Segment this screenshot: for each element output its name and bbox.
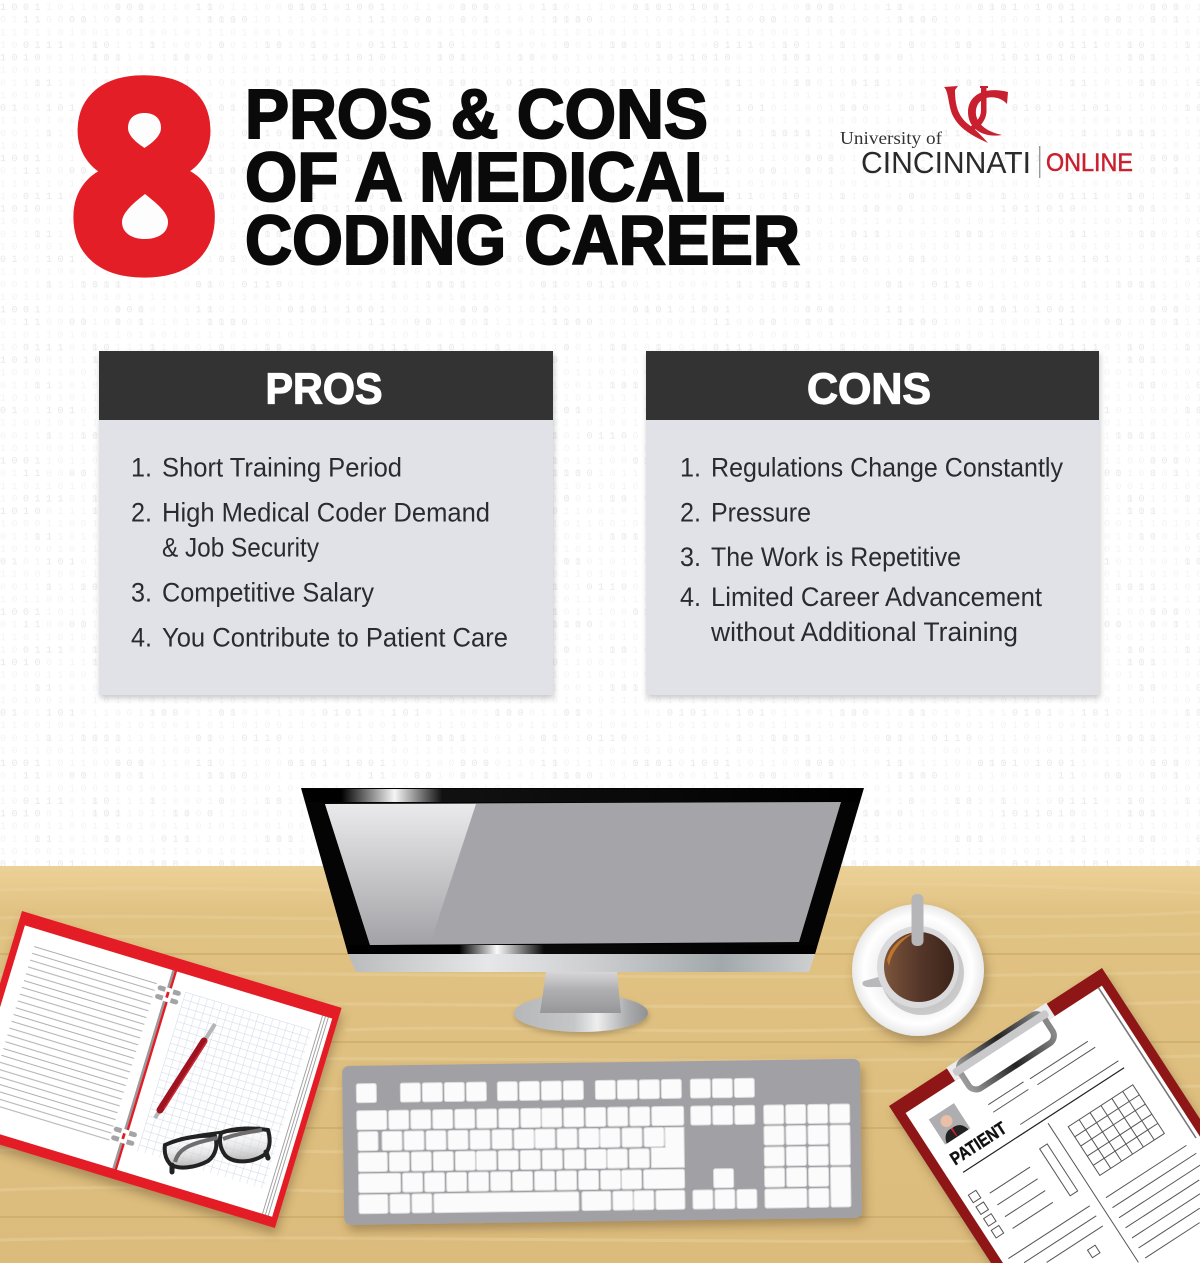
cons list: 1. (680, 452, 701, 482)
title: CODING CAREER (245, 201, 800, 279)
cup rim (877, 926, 959, 1008)
ruled lines (0, 946, 157, 1146)
cup shadow (880, 931, 964, 1015)
icon: coffee cup and saucer (852, 894, 984, 1036)
form table grid (1068, 1085, 1164, 1175)
pros list: 4. (131, 622, 152, 652)
cons list: The Work is Repetitive (711, 542, 961, 572)
spine (112, 970, 175, 1169)
keyboard (342, 1059, 862, 1225)
cons list: 2. (680, 498, 701, 528)
cons header (646, 351, 1099, 420)
binder rings top (154, 985, 181, 1005)
binder rings bottom (111, 1126, 138, 1146)
icon: UC monogram (944, 86, 1008, 143)
clipboard board (889, 968, 1200, 1263)
PATIENT label: PATIENT (946, 1118, 1010, 1169)
monitor stand neck (540, 972, 621, 1013)
logo: University of Cincinnati Online: ONLINE (1046, 149, 1133, 177)
saucer (852, 904, 984, 1036)
logo: University of Cincinnati Online (840, 86, 1133, 180)
red cover (0, 911, 342, 1228)
pros list: 3. (131, 578, 152, 608)
cons list: Limited Career Advancement (711, 582, 1042, 612)
pros list: You Contribute to Patient Care (162, 622, 508, 652)
upper counter (128, 113, 161, 148)
screen (325, 802, 841, 945)
metal clip band (946, 1003, 1055, 1081)
checkboxes (968, 1152, 1100, 1263)
cup handle (862, 976, 886, 987)
paper edge line (1098, 988, 1196, 1138)
coffee (884, 932, 954, 1002)
form lines (932, 1024, 1200, 1263)
pros list: 2. (131, 498, 152, 528)
pros heading: PROS (266, 364, 382, 414)
spoon (912, 894, 924, 946)
pros list (131, 452, 508, 652)
logo: University of Cincinnati Online: CINCINNATI (861, 145, 1031, 180)
cons list (680, 452, 1063, 647)
big number 8: 8 (72, 28, 216, 325)
cons list: without Additional Training (710, 617, 1018, 647)
icon: pen (155, 1024, 215, 1118)
keyboard body (342, 1059, 862, 1225)
icon: glasses (165, 1128, 270, 1172)
cons heading: CONS (807, 364, 931, 414)
spine red strip (115, 971, 177, 1170)
clipboard contents (903, 979, 1200, 1263)
number key row (357, 1104, 850, 1130)
wooden desk (0, 866, 1200, 1263)
binary background pattern (0, 0, 1200, 866)
cons list: Regulations Change Constantly (711, 452, 1063, 482)
patient photo (929, 1103, 970, 1145)
lower counter (122, 194, 168, 239)
solid fill behind the counters (102, 88, 188, 258)
cons list: Pressure (711, 498, 811, 528)
narrow form box (1040, 1144, 1078, 1196)
title: PROS & CONS (245, 75, 708, 153)
left page (0, 925, 173, 1169)
panel: cons (646, 351, 1099, 695)
screen reflection (325, 804, 476, 945)
silver chin (348, 954, 815, 972)
medical clipboard (889, 968, 1200, 1263)
title: OF A MEDICAL (245, 138, 725, 216)
pros header (99, 351, 553, 420)
monitor stand base (514, 994, 648, 1032)
cons list: 3. (680, 542, 701, 572)
right page (117, 972, 332, 1217)
top bezel glare (302, 789, 863, 802)
bottom bezel glare (346, 945, 818, 954)
pros list: 1. (131, 452, 152, 482)
panel: pros (99, 351, 553, 695)
function key row (356, 1078, 754, 1103)
paper sheet (906, 986, 1200, 1263)
clip top bar (952, 1009, 1050, 1077)
coffee crema (887, 933, 914, 966)
pros list: Competitive Salary (162, 578, 374, 608)
pros list: High Medical Coder Demand (162, 498, 490, 528)
logo: University of Cincinnati Online: University of (840, 128, 942, 148)
computer monitor (301, 788, 864, 1032)
graph paper grid (137, 992, 312, 1189)
cons list: 4. (680, 582, 701, 612)
title (245, 75, 800, 279)
open notebook (0, 911, 342, 1228)
home key row (358, 1146, 828, 1172)
black bezel (301, 788, 864, 954)
space bar key row (359, 1188, 829, 1214)
clip loop (956, 1011, 1057, 1093)
pros list: & Job Security (162, 532, 319, 562)
qwerty key row (358, 1125, 850, 1172)
pros list: Short Training Period (162, 452, 402, 482)
shift key row (359, 1167, 851, 1214)
